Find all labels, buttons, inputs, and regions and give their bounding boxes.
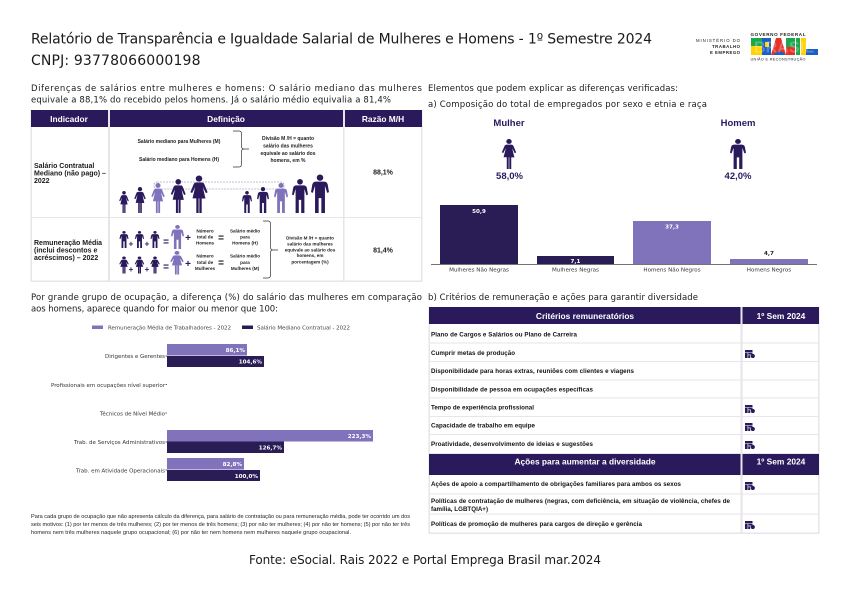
header: 1º Sem 2024: 1º Sem 2024	[757, 311, 806, 321]
legend	[92, 324, 350, 332]
bar: Mulheres Não Negras	[440, 205, 518, 274]
logo: ministry and federal government: MINISTÉRIO DO	[696, 38, 741, 43]
definition text: average men: Homens (H)	[232, 240, 258, 246]
action rows: Políticas de contratação de mulheres (negras, com deficiência, em situação de violência, chefes de	[431, 498, 731, 505]
table header: Definição: Definição	[207, 114, 245, 124]
bar: Mulheres Não Negras: 50,9	[472, 209, 486, 215]
action rows	[431, 481, 731, 528]
ratio: 81,4%: 81,4%	[373, 248, 394, 254]
definition text: mediano: salário das mulheres	[263, 144, 313, 150]
bar: Mulheres Negras: 7,1	[571, 259, 581, 265]
bars: Dirigentes e Gerentes: 104,6%	[239, 360, 262, 366]
figures: average women formula: +	[145, 265, 150, 274]
category labels: Técnicos de Nível Médio	[99, 410, 166, 418]
row label: Salário Contratual: Mediano (não pago) –	[34, 170, 106, 178]
occupation heading: Por grande grupo de ocupação, a diferença (%) do salário das mulheres em comparação	[31, 293, 422, 303]
intro text: Diferenças de salários entre mulheres e homens: O salário mediano das mulheres	[31, 84, 423, 94]
bar: Homens Não Negros	[633, 221, 711, 274]
header: 1º Sem 2024 actions: 1º Sem 2024	[757, 456, 806, 466]
definition text: mediano: Salário mediano para Homens (H)	[139, 157, 219, 163]
definition text: mediano: Divisão M /H = quanto	[262, 136, 314, 142]
header: Ações para aumentar a diversidade: Ações para aumentar a diversidade	[514, 456, 656, 466]
legend: Salário Mediano Contratual - 2022	[257, 324, 350, 332]
action rows: Ações de apoio a compartilhamento de obrigações familiares para ambos os sexos	[431, 481, 682, 488]
section b heading: b) Critérios de remuneração e ações para garantir diversidade	[428, 292, 698, 303]
row label: Remuneração Média	[34, 240, 102, 262]
bars: Dirigentes e Gerentes: 86,1%	[226, 348, 245, 354]
figures: average men formula: +	[129, 240, 134, 248]
title: Relatório de Transparência e Igualdade Salarial de Mulheres e Homens - 1º Semestre 2024	[31, 32, 652, 48]
bar chart: composition	[431, 205, 817, 274]
definition text: average division: salário das mulheres	[287, 242, 333, 246]
definition text: average men: Homens	[196, 240, 215, 246]
header: Ações para aumentar a diversidade	[429, 454, 740, 475]
figures: median salary illustration	[119, 174, 329, 213]
figures: average men formula: +	[145, 240, 150, 248]
logo: ministry and federal government: BRASIL	[754, 40, 814, 56]
criteria rows: Disponibilidade de pessoa em ocupações específicas	[431, 386, 594, 394]
intro text: equivale a 88,1% do recebido pelos homens. Já o salário médio equivalia a 81,4%	[31, 94, 391, 106]
bar: Homens Negros	[730, 251, 808, 274]
category labels	[51, 354, 167, 474]
intro text	[31, 84, 423, 106]
panel: Mulher share: Mulher	[493, 118, 525, 129]
figures: average women formula	[119, 251, 191, 274]
row label: Remuneração Média: Remuneração Média	[34, 240, 102, 247]
footnote: seis motivos: (1) por ter menos de três mulheres; (2) por ter menos de três homens; (3) por não ter mulheres; (4) por não ter homens; (5) por não ter três	[31, 522, 410, 528]
panel: Mulher share: 58,0%	[496, 171, 524, 182]
criteria rows: Tempo de experiência profissional	[431, 404, 534, 412]
category labels: Dirigentes e Gerentes	[105, 354, 165, 360]
category labels: Trab. de Serviços Administrativos	[73, 440, 165, 446]
bar chart: occupation groups	[51, 344, 373, 481]
bar: Homens Negros: 4,7	[764, 251, 774, 257]
definition text: average men: para	[240, 234, 250, 240]
figures: average men formula: +	[185, 233, 191, 244]
footnote	[31, 514, 410, 536]
panel: Homem share: 42,0%	[725, 171, 752, 182]
definition text: average women: para	[240, 260, 250, 265]
panel: Mulher share	[493, 118, 525, 182]
panel: Homem share	[721, 118, 755, 182]
definition text: mediano: homens, em %	[270, 158, 306, 164]
definition text: average division: porcentagem (%)	[291, 260, 329, 264]
logo: ministry and federal government	[696, 32, 818, 62]
action rows: família, LGBTQIA+)	[431, 506, 488, 513]
criteria rows: Disponibilidade para horas extras, reuniões com clientes e viagens	[431, 368, 635, 375]
definition text: mediano: Salário mediano para Mulheres (M)	[138, 139, 221, 145]
logo: ministry and federal government: UNIÃO E RECONSTRUÇÃO	[750, 56, 806, 62]
definition text: average women: total de	[197, 260, 214, 265]
row label: Salário Contratual: 2022	[34, 178, 50, 185]
footnote: homens nem três mulheres naquele grupo ocupacional; (6) por não ter nem homens nem mulheres naquele grupo ocupacional.	[31, 530, 351, 536]
definition text: average men: total de	[197, 234, 214, 240]
occupation heading: aos homens, aparece quando for maior ou menor que 100:	[31, 304, 278, 314]
figures: average women formula: =	[163, 262, 169, 273]
bars: Trab. de Serviços Administrativos: 126,7%	[259, 446, 282, 452]
definition text: average men: =	[218, 233, 224, 244]
footnote: Para cada grupo de ocupação que não apresenta cálculo da diferença, para salário de contratação ou para remuneração média, pode ter ocorrido um dos	[31, 514, 410, 520]
definition text: average men: Número	[196, 228, 214, 234]
section a heading: a) Composição do total de empregados por sexo e etnia e raça	[428, 100, 707, 110]
table header: Indicador	[31, 110, 108, 127]
table header: Razão	[345, 110, 422, 127]
bar: Homens Não Negros: Homens Não Negros	[643, 268, 701, 274]
logo: ministry and federal government: E EMPREGO	[710, 50, 741, 55]
table header: Razão: Razão M/H	[362, 114, 404, 124]
bars: Trab. de Serviços Administrativos: 223,3%	[348, 434, 371, 440]
definition text: average women: Salário médio	[230, 254, 260, 258]
right heading: Elementos que podem explicar as diferenças verificadas:	[428, 84, 678, 94]
bars: Trab. em Atividade Operacionais: 82,8%	[223, 462, 242, 468]
figures: average women formula: +	[129, 265, 134, 274]
definition text: average women: Mulheres (M)	[231, 266, 260, 271]
definition text: average women: Número	[196, 254, 214, 258]
definition text: average women: Mulheres	[195, 266, 216, 271]
definition text: average division: equivale ao salário dos	[285, 248, 336, 252]
legend: Remuneração Média de Trabalhadores - 2022	[108, 324, 231, 332]
figures: average men formula	[120, 225, 191, 249]
bar: Homens Não Negros: 37,3	[665, 224, 679, 230]
panel: indicator table	[30, 110, 422, 282]
header: Critérios remuneratórios	[429, 307, 740, 324]
logo: ministry and federal government: TRABALHO	[712, 44, 741, 49]
definition text: average men: Salário médio	[230, 228, 260, 234]
panel: Homem share: Homem	[721, 118, 755, 129]
logo: ministry and federal government: GOVERNO FEDERAL	[750, 32, 806, 37]
table header: Indicador: Indicador	[50, 114, 89, 124]
icons: actions checked	[745, 482, 755, 529]
bars: Dirigentes e Gerentes	[167, 344, 264, 367]
header: 1º Sem 2024	[742, 307, 819, 324]
criteria rows: Capacidade de trabalho em equipe	[431, 422, 536, 430]
bar: Mulheres Não Negras: Mulheres Não Negras	[449, 268, 509, 274]
criteria rows	[431, 332, 635, 448]
definition text: mediano	[138, 131, 316, 167]
figures: average men formula: =	[163, 237, 169, 248]
definition text: average division	[263, 221, 336, 278]
occupation heading	[31, 293, 422, 314]
panel: criteria table	[428, 307, 820, 534]
definition text: average division: Divisão M /H = quanto	[286, 236, 334, 240]
action rows: Políticas de promoção de mulheres para cargos de direção e gerência	[431, 521, 643, 528]
source: Fonte: eSocial. Rais 2022 e Portal Emprega Brasil mar.2024	[249, 553, 601, 567]
definition text: average men	[196, 228, 260, 246]
header: 1º Sem 2024 actions	[742, 454, 819, 475]
definition text: average division: homens, em	[297, 253, 323, 258]
bar: Mulheres Negras	[537, 256, 614, 274]
category labels: Profissionais em ocupações nível superior	[51, 382, 166, 389]
category labels: Trab. em Atividade Operacionais	[75, 468, 165, 474]
CNPJ: CNPJ: 93778066000198	[31, 53, 200, 69]
definition text: average women: =	[218, 258, 224, 269]
bars: Trab. em Atividade Operacionais	[167, 458, 260, 481]
bars: Trab. em Atividade Operacionais: 100,0%	[235, 474, 258, 480]
row label: Salário Contratual: Salário Contratual	[34, 163, 94, 170]
ratio: 88,1%: 88,1%	[373, 170, 394, 176]
criteria rows: Cumprir metas de produção	[431, 350, 515, 357]
definition text: average women	[195, 254, 260, 271]
definition text: mediano: equivale ao salário dos	[260, 151, 316, 157]
figures: average women formula: +	[185, 259, 191, 270]
row label: Remuneração Média: (inclui descontos e	[34, 248, 98, 254]
icons: criteria checked	[745, 350, 755, 449]
bar: Mulheres Negras: Mulheres Negras	[552, 268, 599, 274]
row label: Salário Contratual	[34, 163, 106, 185]
criteria rows: Proatividade, desenvolvimento de ideias e sugestões	[431, 441, 594, 448]
bar: Homens Negros: Homens Negros	[747, 268, 791, 274]
row label: Remuneração Média: acréscimos) – 2022	[34, 255, 98, 262]
header: Critérios remuneratórios: Critérios remuneratórios	[536, 311, 634, 321]
criteria rows: Plano de Cargos e Salários ou Plano de Carreira	[431, 332, 578, 338]
table header: Definição	[110, 110, 343, 127]
bars: Trab. de Serviços Administrativos	[167, 430, 373, 453]
